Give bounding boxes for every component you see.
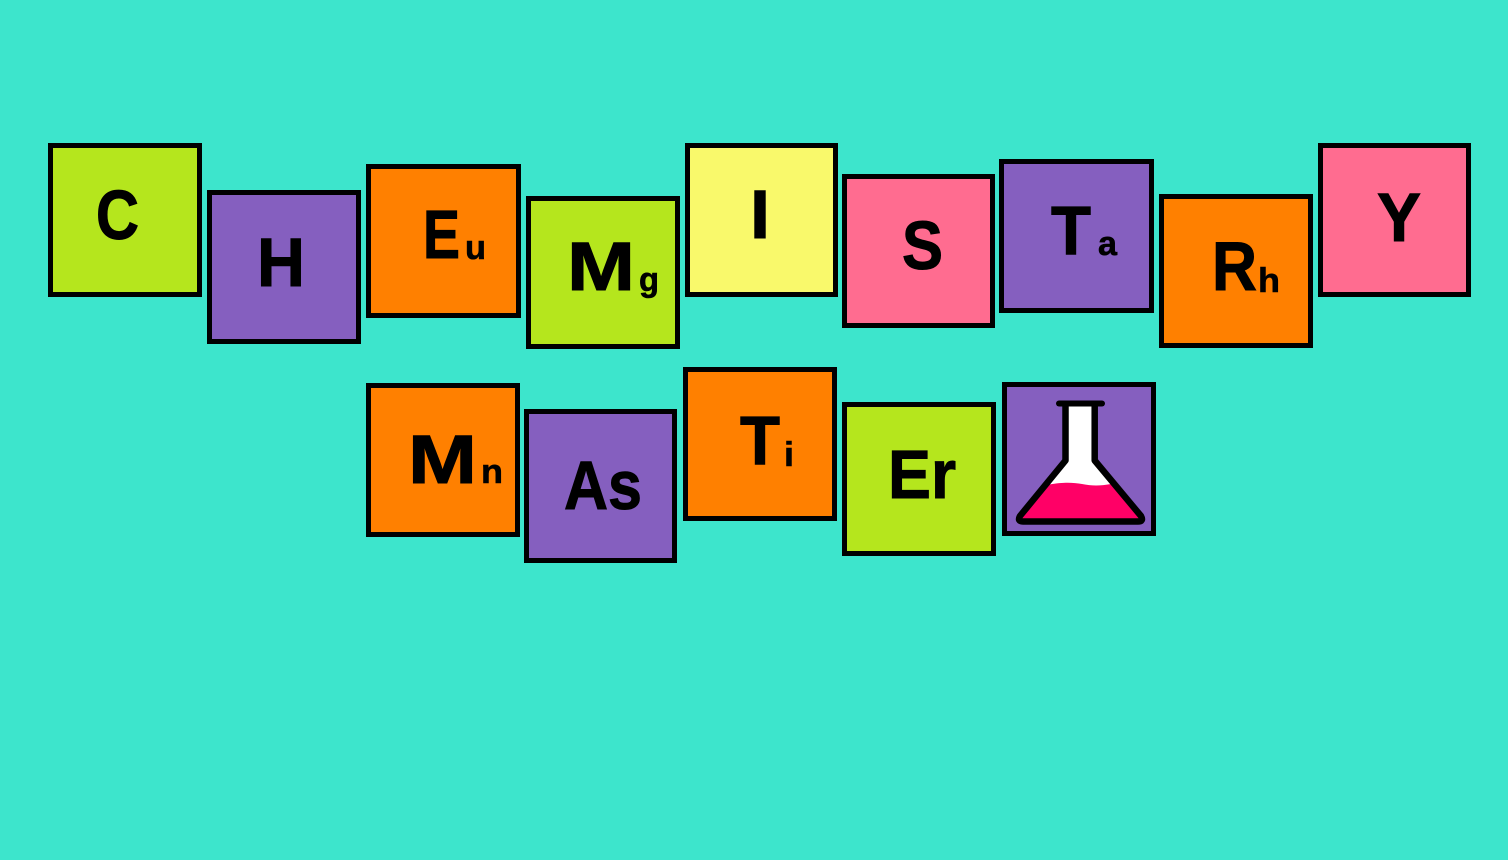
tile: As [526,412,674,560]
tile: Rh: h [1258,262,1280,300]
icon: flask [1019,404,1142,522]
tile: I: I [750,176,770,253]
tile: flask icon [1004,384,1154,534]
tile: Eu: u [465,229,486,267]
tile: Er [844,404,994,554]
tile: S: S [902,207,943,284]
tile: Mn [368,386,518,534]
tile: H [210,192,358,342]
tile: Ti: T [740,402,780,479]
tile: S [844,176,992,326]
tile: Ta: a [1098,225,1118,263]
title row: MASTER [368,370,1154,560]
tile: Mg: g [639,261,659,299]
tile: C [50,146,200,294]
tile: Ti [686,370,834,518]
tile: Ta: T [1051,192,1091,269]
tile: Mn: M [408,421,477,498]
tile: Mg [528,198,678,346]
title row: CHEMISTRY [50,146,1468,346]
tile: Eu: E [423,196,460,273]
tile: Er: Er [888,436,956,513]
tile: Rh [1162,196,1310,346]
tile: Eu [368,166,518,316]
tile: As: As [564,447,642,524]
tile: Rh: R [1212,228,1257,305]
tile: Mn: n [481,453,503,491]
tile: Ti: i [784,436,794,474]
tile: Y: Y [1377,179,1421,256]
tile: H: H [257,224,305,301]
tile: Y [1320,146,1468,294]
tile: I [688,146,836,294]
tile: Ta [1002,162,1152,310]
tile: C: C [96,176,139,254]
tile: Mg: M [567,228,635,305]
